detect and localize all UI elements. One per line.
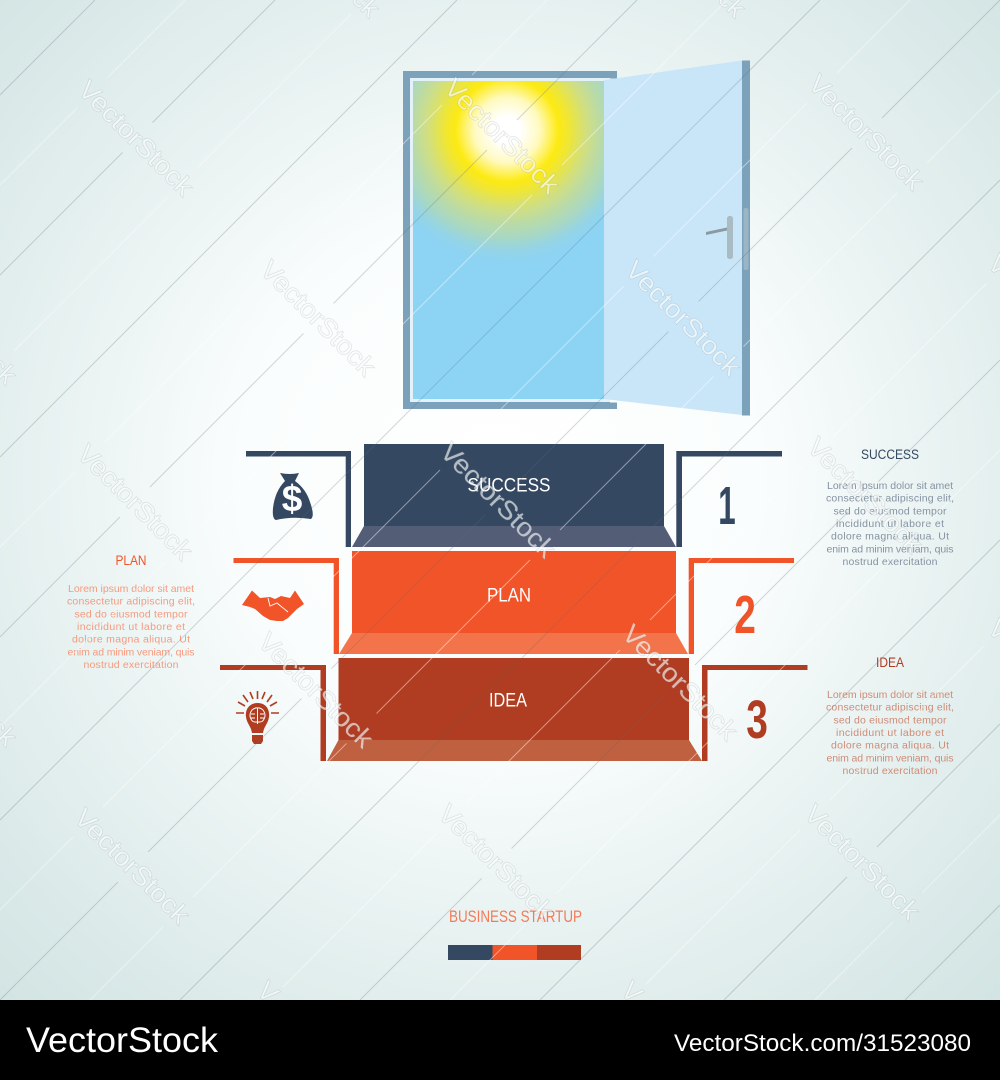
icon: handshake [242,590,304,621]
body copy: success: Lorem ipsum dolor sit amet [827,480,953,492]
body copy: idea: sed do eiusmod tempor [834,714,947,726]
step: idea [327,658,702,761]
heading: plan: PLAN [116,553,146,568]
body copy: plan: sed do eiusmod tempor [74,608,188,620]
body copy: idea: Lorem ipsum dolor sit amet [827,689,953,701]
door edge [742,60,750,416]
watermarks: VectorStock [432,798,560,926]
icon: light bulb with brain [236,691,279,744]
door lock plate [744,208,748,270]
left bracket: plan [234,558,339,654]
icon: money bag [273,473,313,520]
right bracket: number 1 [676,451,782,547]
number 1: 1 [718,476,736,536]
body copy: plan: enim ad minim veniam, quis [68,646,194,658]
body copy: plan: nostrud exercitation [84,659,179,671]
text block: idea [826,655,954,777]
number 2: 2 [734,584,756,644]
body copy: success: incididunt ut labore et [836,518,944,530]
body copy: success: sed do eiusmod tempor [834,505,947,517]
body copy: idea: dolore magna aliqua. Ut [831,740,949,752]
right bracket: number 2 [689,558,794,654]
left bracket: success [246,451,351,547]
watermarks: VectorStock [801,431,929,559]
heading: idea: IDEA [876,655,904,670]
door frame [403,71,617,409]
body copy: success: enim ad minim veniam, quis [826,543,954,555]
heading: success: SUCCESS [861,447,919,462]
body copy: plan [67,583,195,671]
sun glow [413,81,604,254]
body copy: idea: nostrud exercitation [842,765,938,777]
door handle [706,216,733,259]
step: success [352,444,676,547]
watermarks: VectorStock [72,74,200,202]
watermarks: VectorStock [616,618,744,746]
watermarks: VectorStock [798,798,926,926]
text block: success [826,447,954,568]
body copy: idea: consectetur adipiscing elit, [826,702,954,714]
body copy: idea: incididunt ut labore et [836,727,944,739]
number 3: 3 [746,689,768,749]
body copy: success: dolore magna aliqua. Ut [831,531,949,543]
footer brand: VectorStock [26,1021,219,1060]
footer image id: VectorStock.com/31523080 [674,1030,971,1057]
text block: plan [67,553,195,671]
left bracket: idea [220,665,326,761]
body copy: success: consectetur adipiscing elit, [826,493,954,505]
watermarks: VectorStock [619,254,747,382]
watermarks: VectorStock [252,626,380,754]
watermarks: VectorStock [802,68,930,196]
watermarks: VectorStock [438,72,566,200]
right bracket: number 3 [702,665,808,761]
step: success: SUCCESS [468,476,550,496]
door [403,60,750,416]
body copy: plan: Lorem ipsum dolor sit amet [68,583,194,595]
body copy: plan: dolore magna aliqua. Ut [72,634,190,646]
step: idea: IDEA [489,690,527,712]
open door leaf [604,60,742,415]
body copy: plan: incididunt ut labore et [77,621,185,633]
watermarks: VectorStock [434,436,562,564]
step: plan: PLAN [487,586,531,606]
step: plan [339,551,688,654]
body copy: idea: enim ad minim veniam, quis [826,752,954,764]
colour legend bar [448,945,581,960]
title: business startup: BUSINESS STARTUP [449,907,582,926]
inner frame highlight [410,78,610,402]
sky opening [413,81,604,399]
watermarks: VectorStock [68,802,196,930]
body copy: success: nostrud exercitation [842,556,938,568]
footer band [0,1000,1000,1080]
body copy: idea [826,689,954,777]
body copy: success [826,480,954,568]
icon: money bag: $ [282,478,303,519]
watermarks: VectorStock [254,254,382,382]
watermarks: VectorStock [71,438,199,566]
body copy: plan: consectetur adipiscing elit, [67,596,195,608]
